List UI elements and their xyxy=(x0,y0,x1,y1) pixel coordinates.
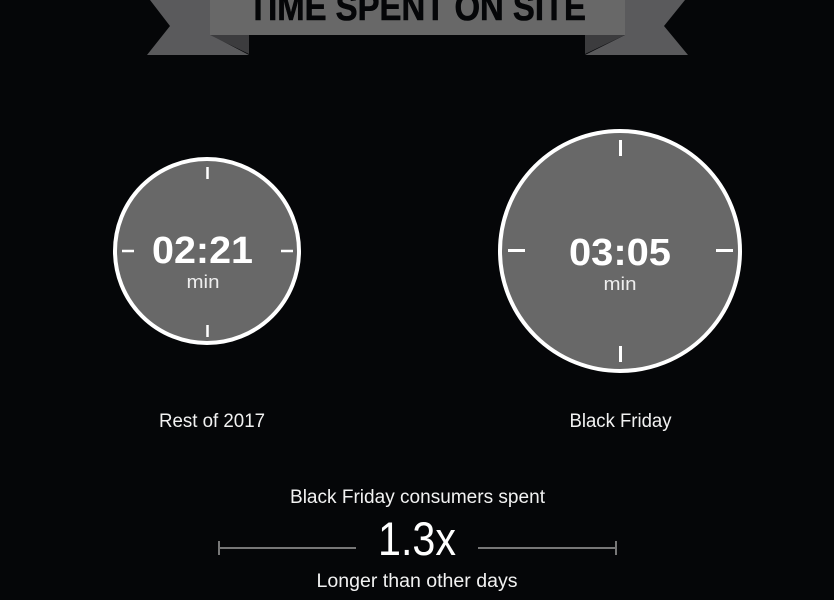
clock time value: 02:21 xyxy=(152,230,253,272)
right bracket line xyxy=(478,541,616,555)
ribbon banner xyxy=(147,0,688,55)
clock unit: min xyxy=(604,274,636,294)
clock: rest of 2017 xyxy=(115,159,299,343)
clock: Black Friday xyxy=(500,131,740,371)
ribbon centre band xyxy=(210,0,625,35)
callout intro text: Black Friday consumers spent xyxy=(290,487,546,508)
multiplier value: 1.3x xyxy=(378,512,456,565)
clock time value: 03:05 xyxy=(569,232,671,274)
label: Black Friday: Black Friday xyxy=(570,411,672,432)
ribbon left fold xyxy=(210,35,249,54)
ribbon right fold xyxy=(585,35,625,54)
clock unit: min xyxy=(186,272,220,292)
callout: 1.3x comparison xyxy=(219,487,616,592)
left bracket line xyxy=(219,541,356,555)
ribbon left tail xyxy=(147,0,249,55)
clock tick marks xyxy=(122,167,293,337)
clock tick marks xyxy=(508,140,733,362)
callout closing text: Longer than other days xyxy=(316,571,518,592)
label: rest of 2017: Rest of 2017 xyxy=(159,411,265,432)
clock face xyxy=(500,131,740,371)
clock face xyxy=(115,159,299,343)
ribbon right tail xyxy=(585,0,688,55)
